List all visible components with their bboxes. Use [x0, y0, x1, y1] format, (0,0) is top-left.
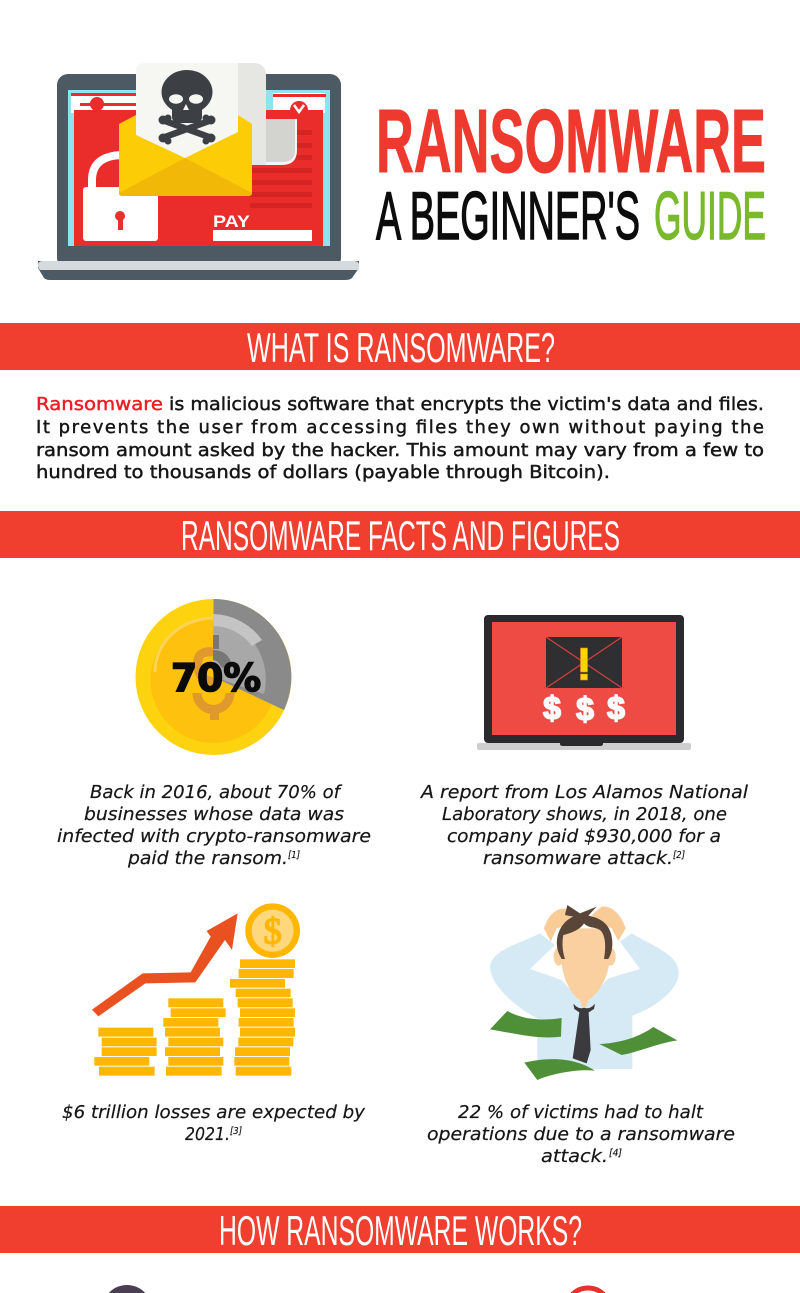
caption: Los Alamos report: [2]: [673, 850, 685, 861]
caption: 70 percent paid: paid the ransom.: [127, 849, 288, 869]
laptop base: [38, 261, 359, 280]
text block: definition: is malicious software that encrypts the victim's data and files.: [169, 394, 764, 415]
icon: laptop with ransom envelope: [38, 63, 359, 280]
icon: 70% coin chart: 70%: [171, 656, 261, 700]
coin stacks: [94, 959, 295, 1076]
banknotes: [490, 1011, 677, 1080]
arrow: [92, 913, 238, 1016]
tie: [573, 1004, 595, 1063]
text block: definition: ransom amount asked by the hacker. This amount may vary from a few to: [36, 440, 764, 461]
caption: Los Alamos report: ransomware attack.: [483, 849, 673, 869]
caption: Los Alamos report: A report from Los Alamos National: [420, 783, 748, 803]
icon: skull and crossbones: [158, 70, 216, 144]
icon: dark circle cropped at page bottom: [102, 1285, 152, 1293]
caption: 70 percent paid: [1]: [288, 850, 300, 861]
icon: red ring cropped at page bottom: [566, 1288, 610, 1293]
caption: 22 percent halted: attack.: [541, 1147, 608, 1167]
icon: padlock: [83, 155, 158, 241]
icon: yellow envelope: [119, 115, 252, 196]
icon: laptop with ransom envelope: PAY: [213, 212, 251, 231]
caption: Los Alamos report: company paid $930,000 for a: [447, 827, 721, 847]
caption: 70 percent paid: Back in 2016, about 70% of: [90, 783, 343, 803]
icon: laptop with dollar demand: $: [607, 690, 625, 726]
hair: [557, 905, 612, 959]
hands: [544, 909, 580, 942]
caption: 22 percent halted: 22 % of victims had to halt: [458, 1103, 704, 1123]
icon: laptop with dollar demand: $: [576, 691, 594, 727]
head: [554, 928, 616, 1007]
caption: 22 percent halted: [427, 1103, 735, 1167]
shirt: [490, 933, 679, 1069]
icon: 70% coin chart: [136, 599, 292, 755]
caption: 70 percent paid: [57, 783, 371, 869]
caption: 6 trillion losses: 2021.: [185, 1125, 230, 1145]
top coin: [245, 903, 300, 958]
caption: 6 trillion losses: $6 trillion losses are expected by: [62, 1103, 366, 1123]
icon: stressed businessman: [490, 905, 679, 1080]
top coin: $: [263, 911, 282, 952]
heading: what is ransomware: [0, 323, 800, 371]
caption: Los Alamos report: [420, 783, 748, 869]
caption: 70 percent paid: businesses whose data was: [84, 805, 344, 825]
text block: definition: Ransomware: [36, 394, 163, 415]
caption: 6 trillion losses: [3]: [230, 1126, 242, 1137]
caption: Los Alamos report: Laboratory shows, in 2018, one: [442, 805, 727, 825]
caption: 70 percent paid: infected with crypto-ransomware: [57, 827, 371, 847]
text block: definition: [36, 394, 764, 483]
text block: definition: It prevents the user from accessing files they own without paying the: [36, 417, 764, 438]
heading: what is ransomware: WHAT IS RANSOMWARE?: [247, 324, 555, 371]
icon: laptop with dollar demand: [477, 615, 691, 750]
icon: rising coin stacks: [92, 903, 300, 1076]
icon: laptop with dollar demand: $: [543, 690, 561, 726]
caption: 22 percent halted: [4]: [609, 1148, 622, 1159]
text block: definition: hundred to thousands of dollars (payable through Bitcoin).: [36, 462, 610, 483]
icon: paper scroll: [136, 63, 297, 165]
caption: 6 trillion losses: [62, 1103, 366, 1145]
title: [376, 92, 766, 254]
caption: 22 percent halted: operations due to a ransomware: [427, 1125, 735, 1145]
